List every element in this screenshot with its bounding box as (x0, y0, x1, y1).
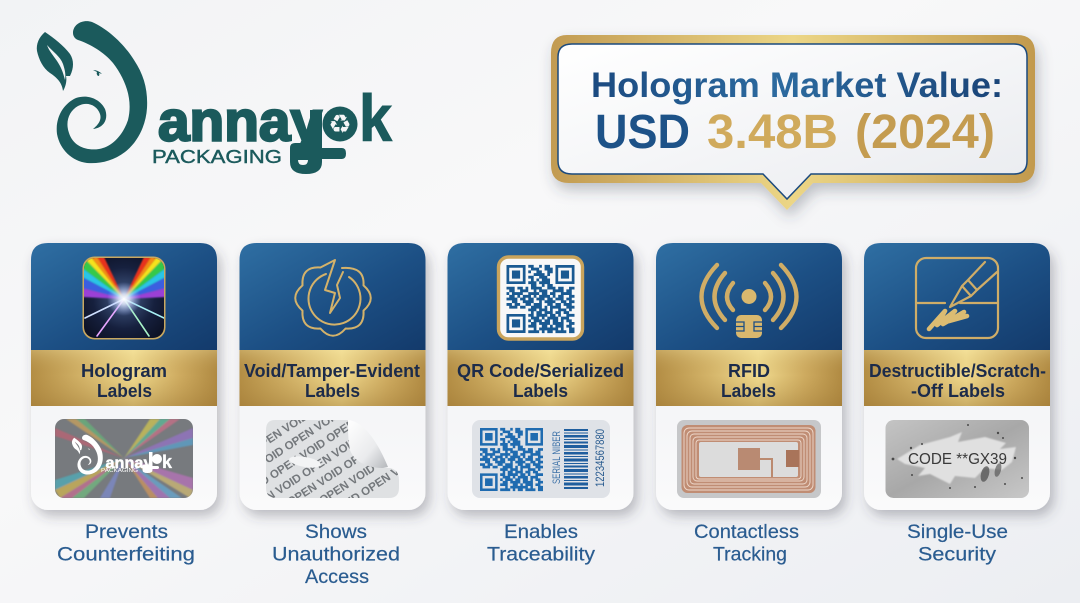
icon: recycle o (322, 106, 358, 142)
card title: QR Code/Serialized (457, 361, 624, 381)
sample: void label with peeled corner (266, 420, 399, 498)
callout value: USD (595, 106, 690, 159)
card title: Hologram (81, 361, 167, 381)
y bowl notch (298, 160, 308, 165)
callout value: (2024) (855, 106, 995, 159)
caption: single-use security (907, 521, 1008, 566)
caption: single-use security: Security (918, 544, 996, 566)
sample: serialized QR label (472, 420, 610, 498)
small logo on label: annay (106, 455, 153, 472)
panel: void/tamper-evident labels (236, 242, 437, 524)
sample: void label with peeled corner: OPEN VOID OPEN VOID OPEN VOID (261, 426, 434, 544)
callout value (595, 106, 995, 159)
y descender bowl (290, 110, 346, 174)
serial text: SERIAL NIBER (551, 431, 563, 484)
panel: RFID labels (656, 243, 842, 510)
icon: hologram light burst (82, 256, 166, 340)
peeled corner (348, 420, 388, 468)
panel: hologram labels (31, 243, 217, 510)
card title: Labels (97, 381, 152, 401)
card title: Labels (305, 381, 360, 401)
card title (869, 361, 1046, 401)
caption: prevents counterfeiting: Counterfeiting (57, 544, 195, 566)
callout value: 3.48B (707, 106, 838, 159)
logo wordmark: annay (158, 90, 322, 154)
caption: contactless tracking: Tracking (713, 544, 787, 566)
panel: QR code/serialized labels (448, 243, 634, 510)
icon: QR code (498, 257, 582, 339)
icon: scratching pen (916, 258, 998, 338)
icon: RFID signal and chip (702, 265, 796, 338)
panel: destructible/scratch-off labels (864, 243, 1050, 510)
sample: void label with peeled corner: VOID OPEN VOID OPEN VOID OPEN (224, 354, 397, 472)
card title (81, 361, 167, 401)
caption: shows unauthorized access: Shows (305, 521, 367, 543)
callout: hologram market value (551, 35, 1035, 210)
card title: Labels (513, 381, 568, 401)
icon: broken seal (295, 260, 371, 336)
small logo on label (72, 435, 173, 474)
card title (244, 361, 420, 401)
sample: RFID antenna label (677, 420, 821, 498)
sample: scratch-off label (886, 420, 1029, 498)
card title: -Off Labels (911, 381, 1005, 401)
caption: contactless tracking: Contactless (694, 521, 799, 543)
caption: prevents counterfeiting: Prevents (85, 521, 168, 543)
small logo on label: k (162, 452, 173, 472)
card title (457, 361, 624, 401)
callout heading: Hologram Market Value: (591, 66, 1003, 105)
card title (721, 361, 776, 401)
caption: single-use security: Single-Use (907, 521, 1008, 543)
sample: holographic label (55, 419, 193, 498)
barcode (564, 429, 588, 489)
small logo on label: PACKAGING (101, 468, 138, 474)
logo: Dannayak Packaging (37, 21, 392, 174)
caption: shows unauthorized access (272, 521, 400, 588)
sample: void label with peeled corner: OPEN VOID OPEN VOID OPEN VOID (244, 399, 416, 517)
logo tagline: PACKAGING (152, 147, 282, 167)
sample: void label with peeled corner: VOID OPEN VOID OPEN VOID OPEN (242, 381, 414, 499)
card title: RFID (728, 361, 770, 381)
caption: shows unauthorized access: Unauthorized (272, 544, 400, 566)
sample: void label with peeled corner: VOID OPEN VOID OPEN VOID OPEN (259, 408, 432, 526)
caption: enables traceability (487, 521, 595, 566)
caption: contactless tracking (694, 521, 799, 566)
caption: shows unauthorized access: Access (305, 566, 369, 588)
scratch code: CODE **GX39 (908, 451, 1007, 468)
caption: enables traceability: Enables (504, 521, 578, 543)
caption: prevents counterfeiting (57, 521, 195, 566)
card title: Destructible/Scratch- (869, 361, 1046, 381)
card title: Void/Tamper-Evident (244, 361, 420, 381)
icon: recycle o: ♻ (328, 110, 352, 140)
serial number: 12234567880 (595, 429, 607, 487)
logo letter k: k (359, 81, 392, 155)
caption: enables traceability: Traceability (487, 544, 595, 566)
sample: void label with peeled corner: VOID OPEN VOID OPEN VOID OPEN (277, 435, 449, 553)
icon: elephant trunk and leaf (37, 21, 147, 163)
card title: Labels (721, 381, 776, 401)
sample: void label with peeled corner: OPEN VOID OPEN VOID OPEN VOID (226, 372, 399, 490)
